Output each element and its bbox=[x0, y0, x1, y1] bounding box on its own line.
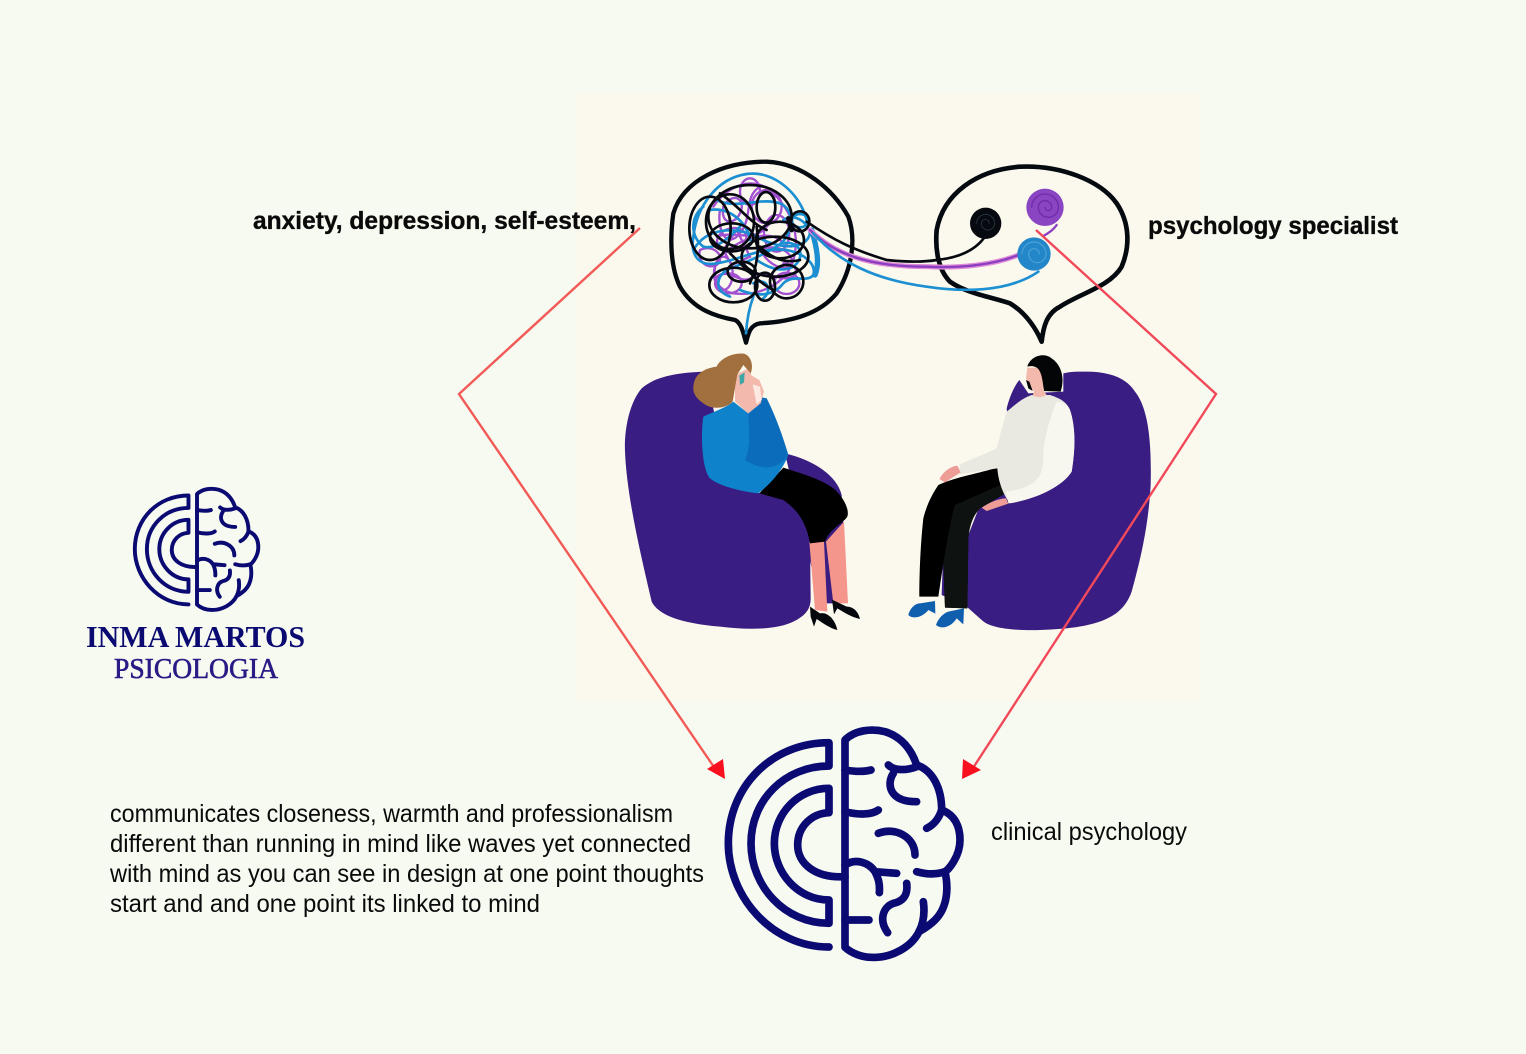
sweater bbox=[702, 397, 788, 493]
face bbox=[1026, 368, 1047, 397]
text block: logo description bbox=[109, 800, 704, 918]
hands bbox=[939, 466, 1008, 511]
thread ball: blue bbox=[1017, 237, 1051, 271]
skirt bbox=[759, 468, 848, 543]
text block: logo description: with mind as you can see in design at one point thoughts bbox=[109, 860, 704, 888]
arrow: specialist to clinical psychology bbox=[962, 230, 1216, 779]
speech bubble: specialist bbox=[936, 167, 1127, 342]
label: psychology specialist: psychology specialist bbox=[1148, 212, 1399, 240]
shoes bbox=[908, 601, 964, 627]
armchair bbox=[942, 372, 1151, 630]
logo subtitle: PSICOLOGIA bbox=[114, 653, 278, 685]
label: clinical psychology: clinical psychology bbox=[991, 818, 1187, 846]
hair bbox=[1026, 355, 1063, 392]
armchair bbox=[625, 372, 811, 629]
trousers bbox=[919, 468, 1014, 608]
sweater arm shadow bbox=[745, 397, 788, 467]
figure: patient in armchair bbox=[625, 353, 860, 630]
hand highlight bbox=[753, 384, 762, 404]
panel: illustration background bbox=[575, 92, 1200, 702]
strands connecting tangle to untangled balls bbox=[807, 222, 1057, 290]
logo: Inma Martos Psicologia bbox=[86, 489, 305, 685]
illustration: tangled and untangled thoughts bbox=[671, 162, 1127, 343]
legs bbox=[809, 522, 848, 612]
text block: logo description: different than running in mind like waves yet connected bbox=[110, 830, 691, 858]
text block: logo description: start and and one point its linked to mind bbox=[110, 890, 540, 918]
trouser leg shade bbox=[943, 485, 1014, 608]
thread ball: purple bbox=[1026, 189, 1064, 226]
face and hands bbox=[735, 368, 764, 413]
speech bubble: patient bbox=[671, 162, 852, 343]
logo brain icon bbox=[135, 489, 258, 610]
hair bbox=[693, 353, 752, 408]
thread ball: black bbox=[970, 208, 1001, 239]
sweater sleeve bbox=[1006, 402, 1074, 503]
armchair rear arm bbox=[785, 453, 844, 603]
tear bbox=[739, 372, 745, 385]
icon: large brain bbox=[728, 730, 960, 957]
sweater bbox=[958, 395, 1074, 503]
label: anxiety, depression, self-esteem: anxiety, depression, self-esteem, bbox=[253, 207, 636, 235]
text block: logo description: communicates closeness, warmth and professionalism bbox=[110, 800, 673, 828]
shoes bbox=[810, 600, 860, 630]
arrow: patient issues to clinical psychology bbox=[459, 228, 725, 779]
thought tangle bbox=[689, 174, 817, 333]
logo name: INMA MARTOS bbox=[86, 619, 305, 654]
figure: psychology specialist in armchair bbox=[908, 355, 1151, 630]
